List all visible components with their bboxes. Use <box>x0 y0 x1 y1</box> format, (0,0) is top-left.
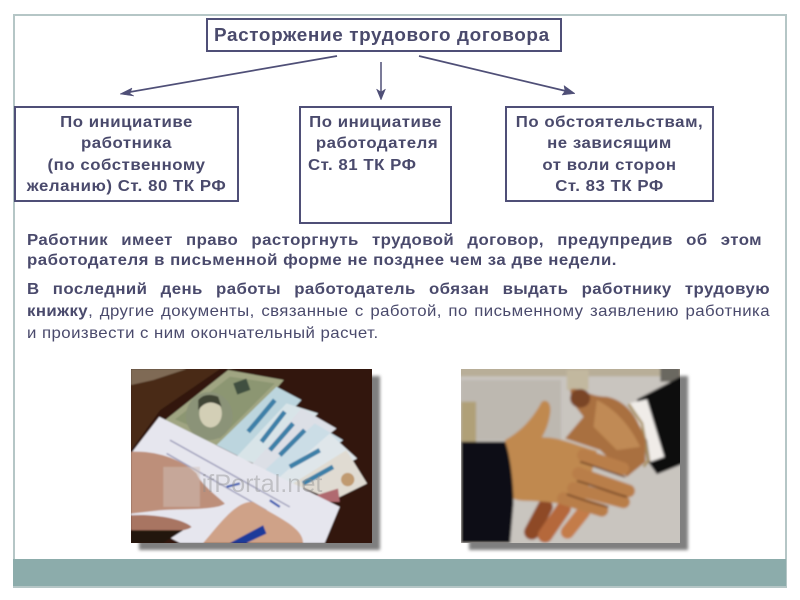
text block: notice rule: Работник имеет право расторгнуть трудовой договор, предупредив об этом <box>27 232 762 249</box>
watermark: ifPortal.net <box>202 470 322 498</box>
photo: handshake <box>461 369 680 543</box>
title box <box>206 18 562 52</box>
box: circumstances <box>505 106 714 202</box>
text block: notice rule <box>27 232 762 269</box>
text block: last working day: и произвести с ним окончательный расчет. <box>27 325 379 342</box>
box: circumstances: По обстоятельствам, <box>516 114 703 131</box>
box: employee initiative: (по собственному <box>48 157 205 174</box>
text block: last working day <box>27 281 770 342</box>
text block: last working day: В последний день работы работодатель обязан выдать работнику трудовую <box>27 281 770 298</box>
photo shadow: money <box>139 376 380 550</box>
box: employee initiative: желанию) Ст. 80 ТК РФ <box>27 178 226 195</box>
box: circumstances: не зависящим <box>547 135 672 152</box>
box: employer initiative: Ст. 81 ТК РФ <box>308 157 417 174</box>
text block: notice rule: работодателя в письменной форме не позднее чем за две недели. <box>27 252 617 269</box>
box: employee initiative <box>14 106 239 202</box>
photo: money and envelope <box>131 369 372 543</box>
arrow: to employer initiative <box>376 62 386 100</box>
photo shadow: handshake <box>469 376 688 550</box>
box: circumstances: Ст. 83 ТК РФ <box>555 178 664 195</box>
text block: last working day: книжку, другие документы, связанные с работой, по письменному заявлению работника <box>27 303 770 320</box>
arrow: to employee initiative <box>120 55 338 96</box>
title box: Расторжение трудового договора <box>214 25 550 45</box>
box: circumstances: от воли сторон <box>542 157 677 174</box>
box: employee initiative: работника <box>81 135 172 152</box>
arrow: to circumstances <box>418 55 575 96</box>
box: employer initiative: По инициативе <box>309 114 442 131</box>
footer band <box>13 559 786 586</box>
box: employer initiative: работодателя <box>316 135 438 152</box>
box: employer initiative <box>299 106 452 224</box>
box: employee initiative: По инициативе <box>60 114 193 131</box>
